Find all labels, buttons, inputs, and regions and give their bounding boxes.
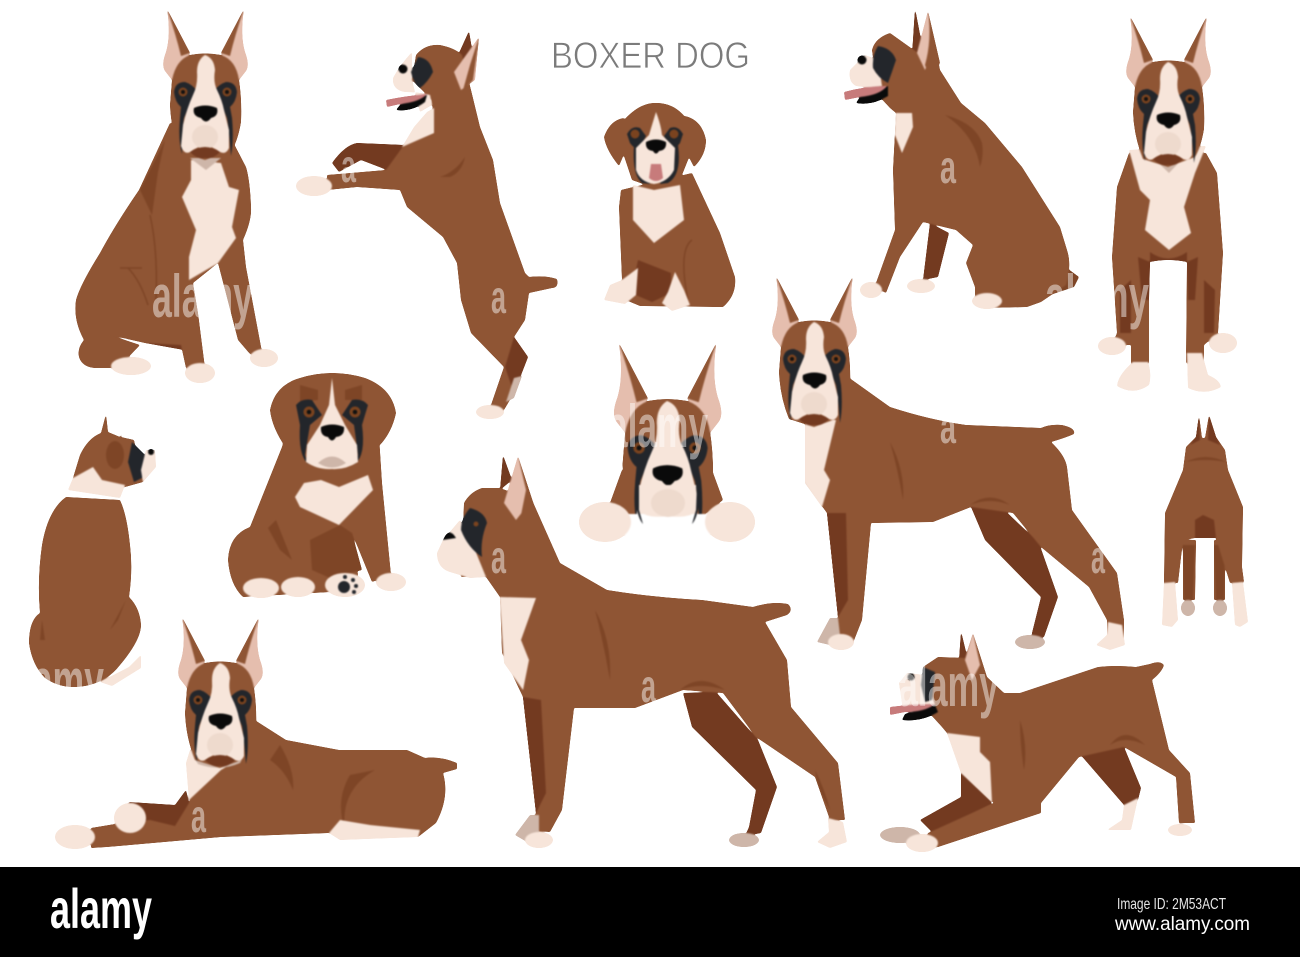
dog: rearing up, side view (296, 31, 557, 419)
dog: sitting, side view facing left (844, 8, 1079, 309)
head (73, 414, 143, 487)
dog: standing, front view (1098, 16, 1237, 392)
watermark: single letter overlays: a (1091, 531, 1105, 583)
puppy: sitting with paw pad shown (228, 373, 406, 598)
website: www.alamy.com (1114, 914, 1250, 935)
chest patch (1129, 146, 1206, 250)
pink ear (454, 37, 479, 90)
chest (186, 750, 243, 800)
heart-shaped chest patch (295, 475, 373, 525)
watermark: large alamy overlays: alamy (152, 263, 253, 330)
watermark: single letter overlays (191, 140, 1105, 842)
body of sitting dog (75, 123, 262, 368)
chest patch (500, 597, 536, 690)
title: BOXER DOG (551, 35, 750, 76)
footer bar (0, 867, 1300, 957)
watermark: large alamy overlays: alamy (898, 652, 999, 719)
puppy: sitting, front (604, 103, 735, 311)
watermark: large alamy overlays: alamy (608, 393, 708, 460)
dog: rear view (1162, 415, 1248, 627)
dog: large standing side profile (437, 455, 847, 848)
watermark: large alamy overlays (3, 263, 1149, 719)
watermark: single letter overlays: a (940, 141, 956, 193)
dog: head resting over paws (579, 343, 755, 542)
chest patch (805, 420, 836, 507)
footer logo: alamy (50, 877, 152, 940)
chest patch (182, 160, 239, 280)
watermark: single letter overlays: a (491, 271, 506, 323)
chest patch (633, 185, 684, 243)
dog: play bow (880, 631, 1195, 852)
watermark: single letter overlays: a (341, 140, 356, 192)
watermark: single letter overlays: a (491, 531, 506, 583)
watermark: large alamy overlays: alamy (1045, 263, 1149, 330)
collar marking (68, 467, 125, 498)
image id: Image ID: 2M53ACT (1117, 896, 1226, 913)
watermark: large alamy overlays: alamy (3, 647, 104, 714)
dog: standing, looking at viewer (772, 276, 1125, 650)
watermark: single letter overlays: a (940, 401, 956, 453)
dog: sitting, front three-quarter view (75, 9, 278, 383)
watermark: single letter overlays: a (641, 660, 656, 712)
dog: lying down (55, 617, 457, 849)
dog: back view sitting, looking right (29, 414, 156, 687)
watermark: single letter overlays: a (191, 790, 206, 842)
paw with pads (325, 573, 365, 597)
chest patch (947, 733, 992, 802)
front paws (1117, 362, 1150, 391)
pink ear (504, 456, 532, 520)
